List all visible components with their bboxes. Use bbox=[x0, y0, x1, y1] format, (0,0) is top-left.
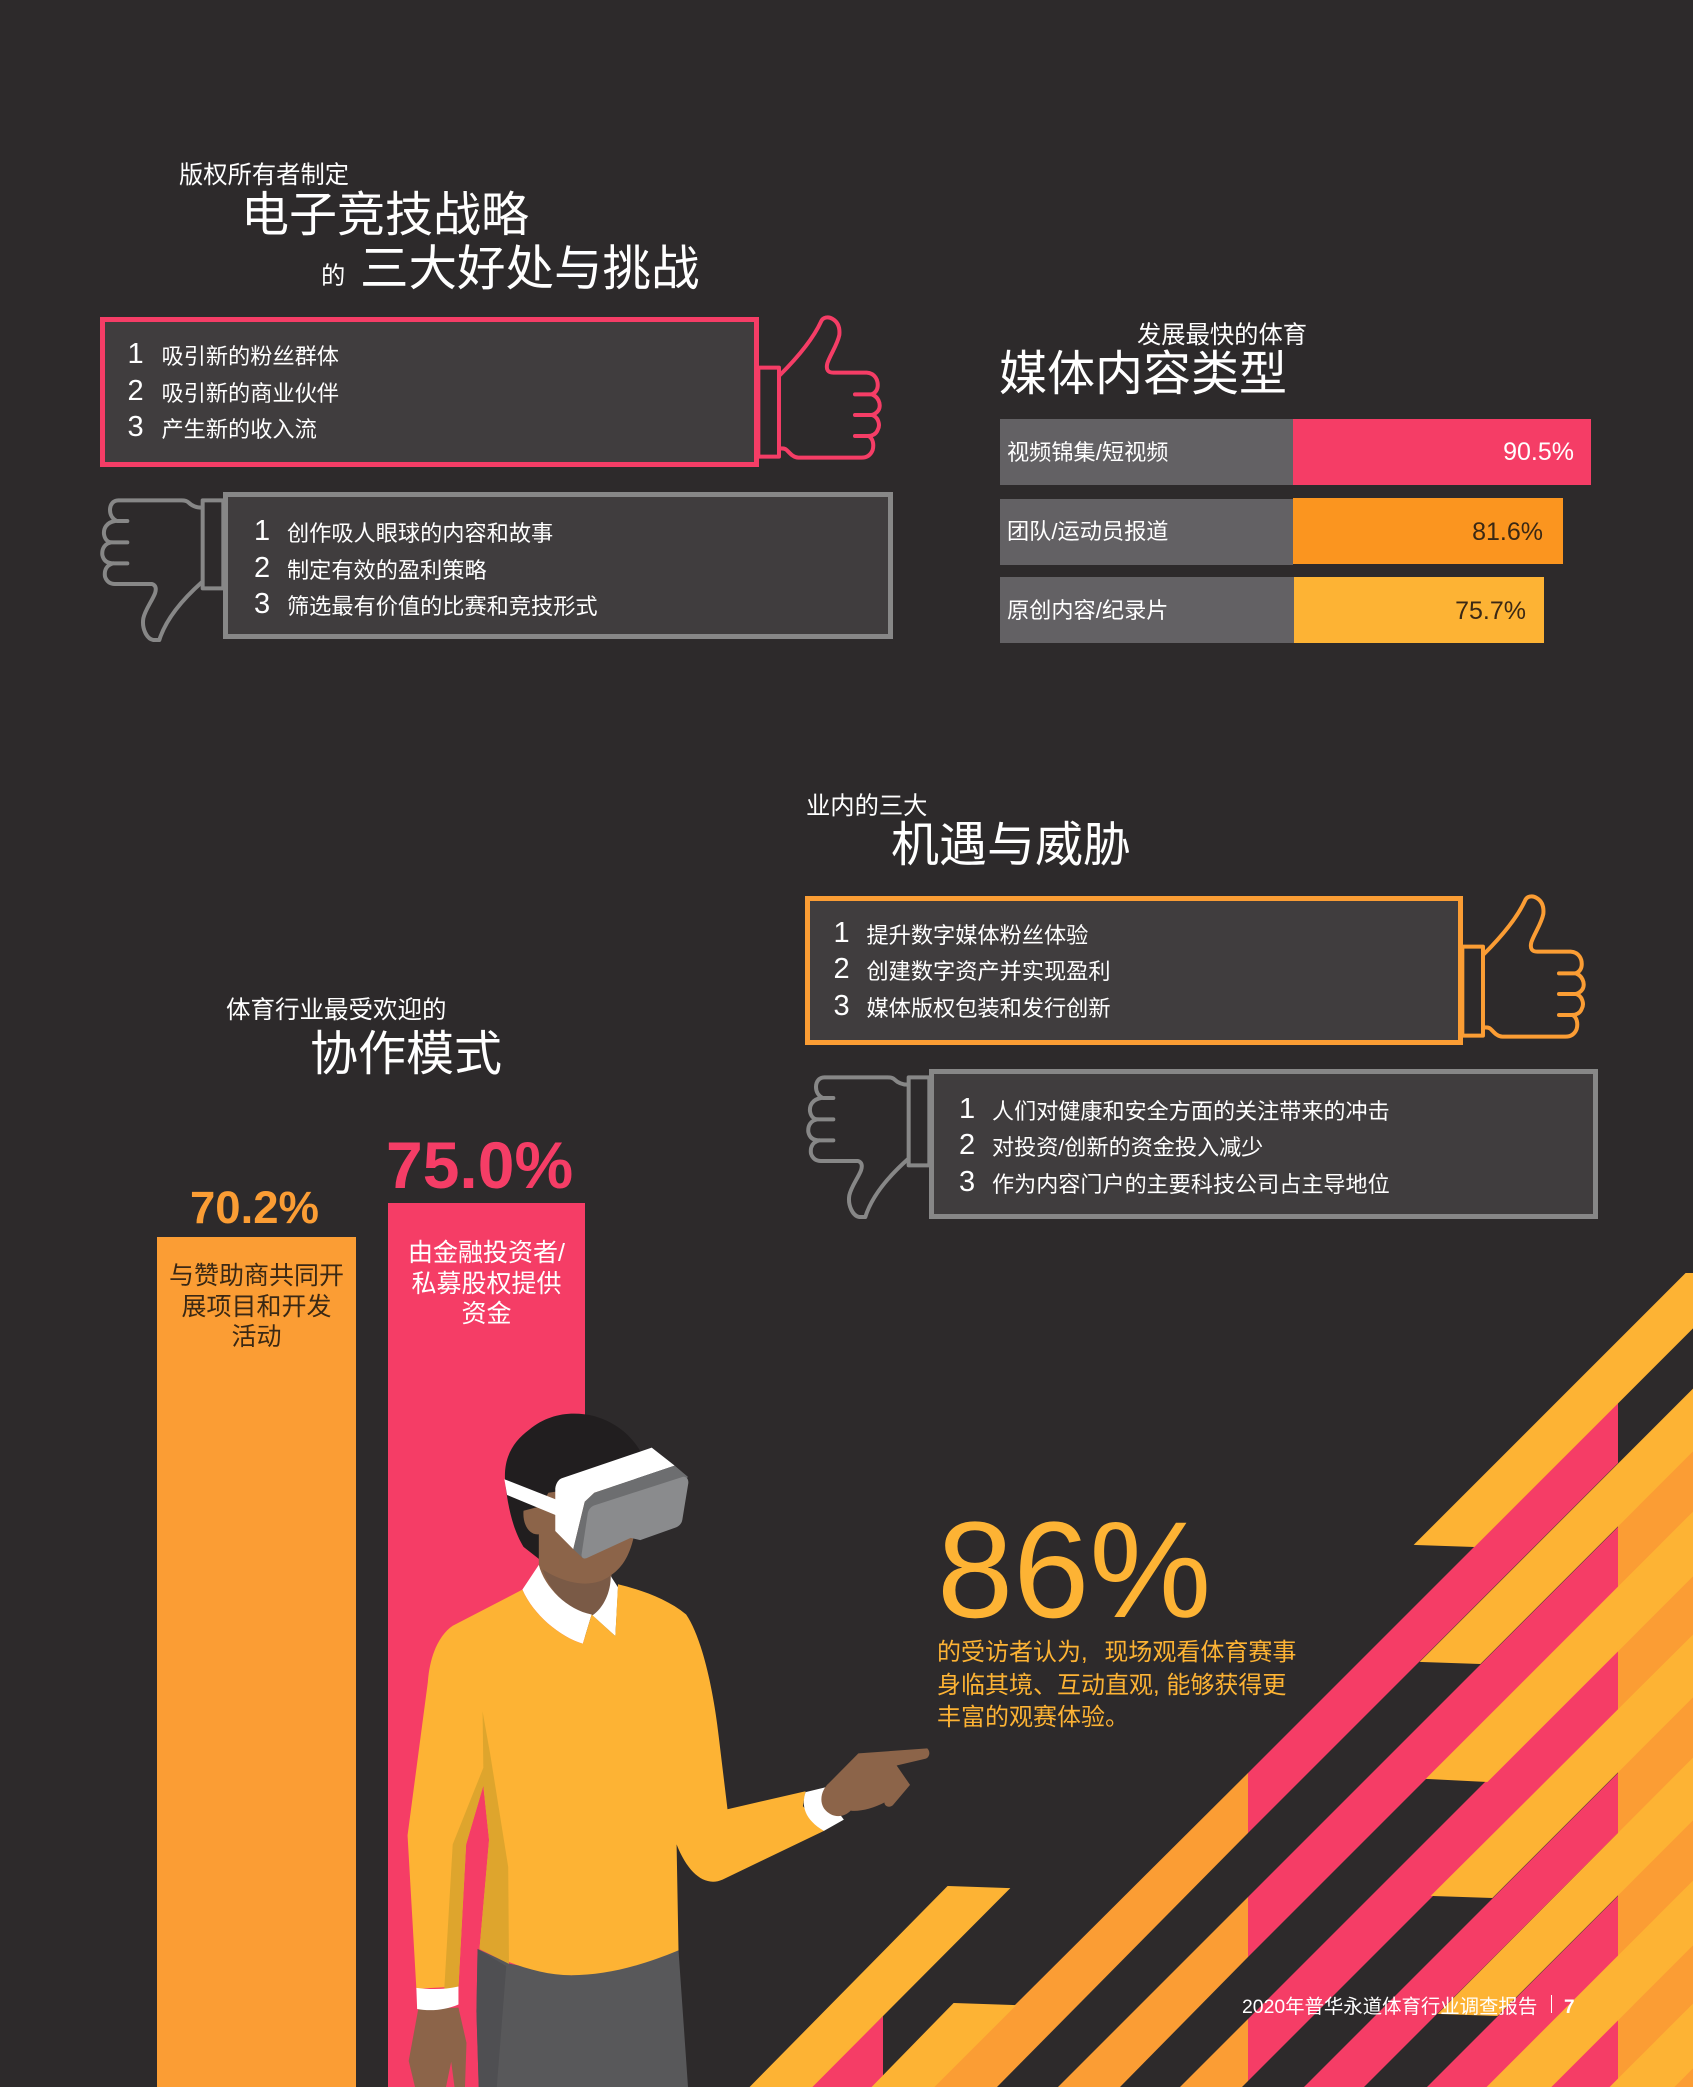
panel: threats bbox=[929, 1069, 1598, 1219]
bar 3 bbox=[1000, 577, 1544, 643]
label: sponsors: 展项目和开发 bbox=[181, 1292, 332, 1320]
panel: challenges: 3 bbox=[254, 588, 270, 620]
label: financial investors bbox=[408, 1239, 565, 1328]
hair bbox=[505, 1414, 642, 1560]
headset strap bbox=[504, 1479, 556, 1515]
bar 1: 90.5% bbox=[1503, 438, 1574, 466]
sub heading connector: 的 bbox=[321, 263, 345, 290]
panel: challenges: 1 bbox=[254, 515, 270, 547]
bar 2: 团队/运动员报道 bbox=[1007, 519, 1168, 544]
page number: 7 bbox=[1564, 1997, 1575, 2018]
headset visor white bbox=[555, 1448, 675, 1549]
panel: threats: 1 bbox=[959, 1093, 975, 1125]
panel: opportunities bbox=[805, 896, 1463, 1045]
callout text: 身临其境、互动直观, 能够获得更 bbox=[937, 1672, 1286, 1698]
main heading line 1: 电子竞技战略 bbox=[241, 189, 529, 242]
bar 1 bbox=[1000, 419, 1591, 485]
callout text: 的受访者认为, 现场观看体育赛事 bbox=[937, 1639, 1296, 1666]
benefit 3: 产生新的收入流 bbox=[162, 417, 317, 442]
panel: challenges bbox=[223, 492, 893, 639]
label: sponsors: 活动 bbox=[231, 1323, 282, 1351]
right cuff bbox=[804, 1787, 844, 1831]
opportunity 2: 创建数字资产并实现盈利 bbox=[866, 959, 1111, 984]
opportunity 1: 提升数字媒体粉丝体验 bbox=[866, 923, 1088, 948]
panel: opportunities: 1 bbox=[834, 917, 850, 949]
column: financial investors pink bbox=[388, 1203, 585, 2087]
panel: benefits: 3 bbox=[128, 411, 144, 443]
bar chart: media content types bbox=[1000, 419, 1591, 643]
big number: 86% bbox=[937, 1494, 1211, 1647]
sweater shading bbox=[444, 1711, 509, 1989]
panel: opportunities: 3 bbox=[834, 990, 850, 1022]
panel: benefits: 2 bbox=[128, 375, 144, 407]
opportunity 2 bbox=[834, 953, 1111, 985]
bar 2 bbox=[1000, 498, 1563, 565]
label: financial investors: 由金融投资者/ bbox=[408, 1239, 565, 1267]
bar 1: 视频锦集/短视频 bbox=[1007, 440, 1168, 465]
benefit 2 bbox=[128, 375, 339, 407]
neck shadow bbox=[543, 1569, 612, 1615]
panel: threats: 2 bbox=[959, 1129, 975, 1161]
sub heading: 体育行业最受欢迎的 bbox=[226, 997, 446, 1024]
challenge 2: 制定有效的盈利策略 bbox=[287, 558, 487, 583]
left hand bbox=[409, 2008, 466, 2087]
benefit 3 bbox=[128, 411, 317, 443]
panel: benefits: 1 bbox=[128, 338, 144, 370]
threat 2 bbox=[959, 1129, 1263, 1161]
label: sponsors: 与赞助商共同开 bbox=[169, 1262, 344, 1290]
footer bbox=[1242, 1995, 1575, 2018]
pants bbox=[476, 1949, 688, 2087]
callout text: 丰富的观赛体验。 bbox=[937, 1704, 1129, 1731]
collar bbox=[522, 1565, 592, 1644]
sweater bbox=[408, 1584, 824, 1989]
panel: challenges: 2 bbox=[254, 552, 270, 584]
challenge 2 bbox=[254, 552, 487, 584]
pointing hand bbox=[821, 1748, 929, 1816]
person wearing VR headset and pointing bbox=[408, 1414, 929, 2087]
challenge 1 bbox=[254, 515, 553, 547]
sub heading: 版权所有者制定 bbox=[179, 162, 349, 189]
main heading: 机遇与威胁 bbox=[891, 819, 1131, 872]
main heading: 协作模式 bbox=[310, 1028, 502, 1081]
threat 1: 人们对健康和安全方面的关注带来的冲击 bbox=[992, 1099, 1390, 1124]
challenge 3: 筛选最有价值的比赛和竞技形式 bbox=[287, 594, 598, 619]
callout text bbox=[937, 1639, 1296, 1731]
headset front bbox=[582, 1477, 688, 1558]
stat: 70.2%: 70.2% bbox=[190, 1182, 319, 1233]
benefit 1 bbox=[128, 338, 339, 370]
face and neck bbox=[523, 1484, 634, 1615]
callout: 86% bbox=[937, 1494, 1296, 1731]
benefit 2: 吸引新的商业伙伴 bbox=[162, 381, 339, 406]
opportunity 3 bbox=[834, 990, 1111, 1022]
headset side dark bbox=[573, 1466, 688, 1558]
label: sponsors bbox=[169, 1262, 344, 1351]
heading: most popular collaboration models bbox=[226, 997, 502, 1081]
stat: 75.0%: 75.0% bbox=[386, 1128, 573, 1202]
panel: threats: 3 bbox=[959, 1166, 975, 1198]
heading: fastest growing media content bbox=[999, 322, 1307, 401]
challenge 1: 创作吸人眼球的内容和故事 bbox=[287, 521, 553, 546]
panel: opportunities: 2 bbox=[834, 953, 850, 985]
heading: esports strategy bbox=[179, 162, 700, 296]
sub heading: 业内的三大 bbox=[806, 793, 927, 820]
label: financial investors: 资金 bbox=[461, 1300, 512, 1328]
left cuff bbox=[416, 1986, 458, 2010]
panel: benefits bbox=[100, 317, 759, 467]
diagonal stripes bbox=[751, 1274, 1693, 2087]
opportunity 3: 媒体版权包装和发行创新 bbox=[866, 996, 1111, 1021]
label: financial investors: 私募股权提供 bbox=[411, 1270, 562, 1298]
benefit 1: 吸引新的粉丝群体 bbox=[162, 344, 339, 369]
heading: opportunities and threats bbox=[806, 793, 1131, 872]
bar 3: 75.7% bbox=[1455, 597, 1526, 625]
bar 3: 原创内容/纪录片 bbox=[1007, 598, 1168, 623]
opportunity 1 bbox=[834, 917, 1088, 949]
threat 2: 对投资/创新的资金投入减少 bbox=[992, 1135, 1263, 1160]
bar 2: 81.6% bbox=[1472, 518, 1543, 546]
column: sponsor collaboration orange bbox=[157, 1237, 356, 2087]
main heading: 媒体内容类型 bbox=[999, 348, 1287, 401]
main heading line 2: 三大好处与挑战 bbox=[360, 242, 700, 296]
threat 3: 作为内容门户的主要科技公司占主导地位 bbox=[992, 1172, 1390, 1197]
sub heading: 发展最快的体育 bbox=[1137, 322, 1307, 349]
report title: 2020年普华永道体育行业调查报告 bbox=[1242, 1996, 1537, 2018]
